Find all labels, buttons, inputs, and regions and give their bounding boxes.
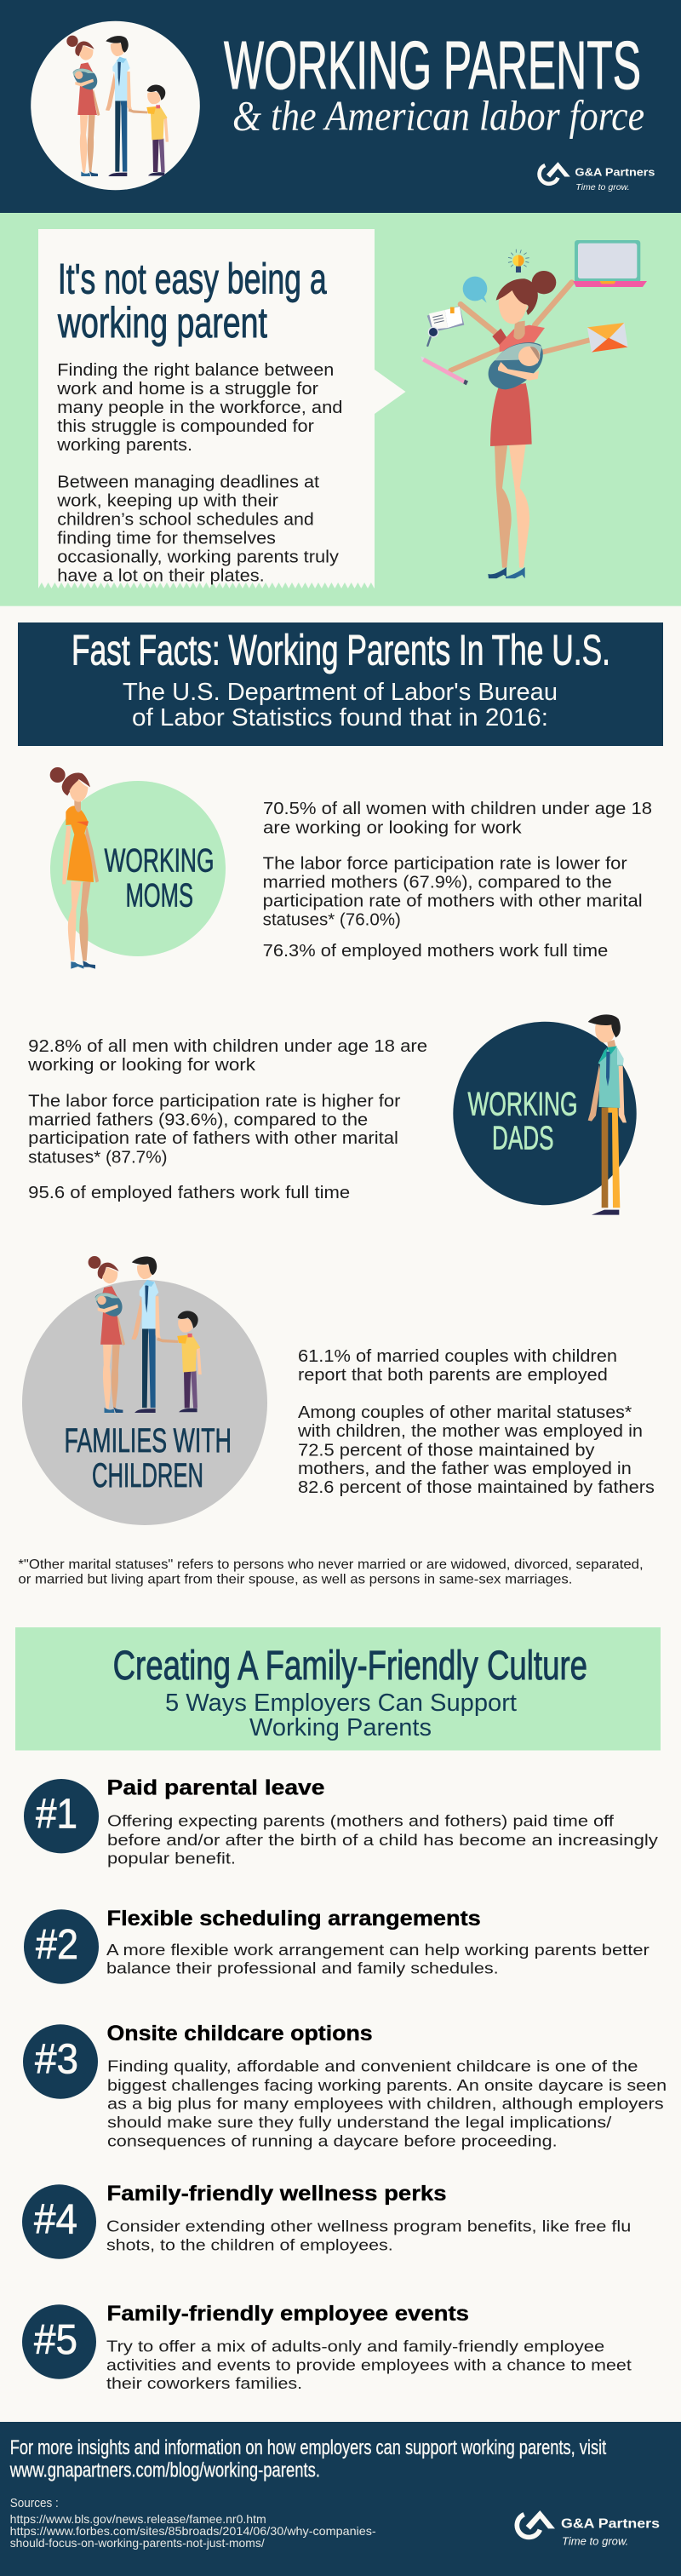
moms statistics: The labor force participation rate is lower for: [263, 854, 627, 873]
intro text: [56, 361, 342, 586]
heading and text: [107, 2022, 667, 2150]
dads statistics: participation rate of fathers with other marital: [28, 1129, 398, 1148]
badge #2: #2: [36, 1922, 78, 1968]
intro heading: working parent: [57, 299, 267, 347]
intro text: many people in the workforce, and: [57, 399, 343, 417]
section heading: family-friendly culture: [15, 1627, 661, 1751]
dads badge: DADS: [492, 1121, 553, 1157]
moms statistics: 76.3% of employed mothers work full time: [263, 942, 608, 961]
dads statistics: married fathers (93.6%), compared to the: [28, 1110, 368, 1129]
moms badge: WORKING: [104, 842, 215, 879]
families statistics: 82.6 percent of those maintained by fathers: [298, 1478, 655, 1497]
moms statistics: [263, 800, 652, 961]
intro text: Between managing deadlines at: [57, 473, 319, 492]
section heading: family-friendly culture: Working Parents: [249, 1714, 432, 1741]
badge #2: [24, 1909, 99, 1984]
icon: lightbulb: [508, 250, 529, 273]
item 4: wellness perks: [22, 2182, 631, 2259]
logo: G&A Partners: [540, 162, 655, 192]
illustration: family: [89, 1256, 202, 1413]
panel: working dads: [27, 1014, 637, 1215]
heading and text: balance their professional and family schedules.: [106, 1959, 499, 1977]
heading and text: shots, to the children of employees.: [106, 2235, 393, 2253]
intro text: children’s school schedules and: [57, 511, 314, 530]
badge #3: [23, 2024, 98, 2099]
moms badge: MOMS: [126, 878, 193, 915]
icon: open book and magnifier: [427, 306, 464, 346]
families statistics: 61.1% of married couples with children: [298, 1347, 617, 1366]
dads statistics: [27, 1037, 427, 1202]
callout card: [38, 229, 405, 588]
sources: [10, 2497, 376, 2550]
sources: should-focus-on-working-parents-not-just-moms/: [10, 2536, 265, 2550]
badge #4: [22, 2184, 96, 2259]
badge #5: [22, 2304, 96, 2379]
panel: intro: [0, 213, 681, 606]
dads statistics: statuses* (87.7%): [28, 1149, 168, 1168]
families statistics: report that both parents are employed: [298, 1366, 608, 1385]
footnote: *"Other marital statuses" refers to persons who never married or are widowed, divorced, separated,: [18, 1558, 644, 1572]
dads statistics: 92.8% of all men with children under age 18 are: [28, 1037, 427, 1056]
heading and text: biggest challenges facing working parents. An onsite daycare is seen: [107, 2076, 667, 2094]
intro text: this struggle is compounded for: [57, 417, 314, 436]
illustration: family in circle: [31, 21, 200, 190]
panel: families with children: [22, 1256, 655, 1525]
families badge: FAMILIES WITH: [65, 1422, 232, 1460]
dads badge: WORKING: [468, 1086, 577, 1122]
logo: G&A Partners: Time to grow.: [562, 2535, 628, 2547]
heading and text: activities and events to provide employees with a chance to meet: [106, 2355, 632, 2373]
logo: G&A Partners: [517, 2510, 660, 2547]
intro text: occasionally, working parents truly: [57, 548, 339, 567]
moms badge: [50, 781, 226, 956]
heading and text: [106, 1907, 650, 1977]
moms statistics: statuses* (76.0%): [263, 911, 401, 930]
icon: speech bubble: [463, 277, 487, 303]
heading and text: Consider extending other wellness program benefits, like free flu: [106, 2217, 631, 2235]
moms statistics: 70.5% of all women with children under age 18: [263, 800, 652, 818]
dads statistics: The labor force participation rate is higher for: [28, 1092, 401, 1110]
families badge: CHILDREN: [92, 1457, 203, 1495]
intro text: finding time for themselves: [57, 530, 276, 548]
illustration: mother in orange dress: [50, 767, 99, 969]
families statistics: [297, 1347, 655, 1497]
icon: laptop: [573, 240, 647, 287]
item 2: flexible scheduling: [24, 1907, 650, 1984]
badge #3: #3: [35, 2036, 78, 2082]
families statistics: Among couples of other marital statuses*: [298, 1403, 632, 1422]
logo: G&A Partners: Time to grow.: [575, 183, 630, 192]
illustration: multitasking mother: [421, 240, 647, 578]
section heading: fast facts: [18, 622, 663, 746]
footnote: or married but living apart from their spouse, as well as persons in same-sex marriages.: [18, 1572, 572, 1586]
sources: https://www.bls.gov/news.release/famee.nr0.htm: [10, 2512, 266, 2526]
families statistics: 72.5 percent of those maintained by: [298, 1441, 594, 1460]
heading and text: Flexible scheduling arrangements: [107, 1907, 481, 1931]
item 3: onsite childcare: [23, 2022, 667, 2150]
heading and text: [107, 1776, 659, 1867]
footer: [0, 2422, 681, 2576]
logo: G&A Partners: G&A Partners: [561, 2516, 660, 2531]
heading and text: Offering expecting parents (mothers and fothers) paid time off: [107, 1812, 615, 1829]
header banner: [0, 0, 681, 213]
item 1: paid parental leave: [24, 1776, 659, 1867]
heading and text: Onsite childcare options: [107, 2022, 373, 2045]
heading and text: as a big plus for many employees with children, although employers: [107, 2095, 664, 2113]
heading and text: Finding quality, affordable and convenient childcare is one of the: [107, 2057, 638, 2075]
heading and text: Paid parental leave: [107, 1776, 325, 1800]
heading and text: Family-friendly wellness perks: [107, 2182, 446, 2206]
logo: G&A Partners: G&A Partners: [575, 166, 655, 179]
badge #1: [24, 1779, 99, 1853]
heading and text: their coworkers families.: [106, 2374, 302, 2392]
intro text: work and home is a struggle for: [56, 380, 318, 399]
badge #5: #5: [34, 2317, 77, 2363]
intro text: work, keeping up with their: [56, 492, 278, 511]
heading and text: before and/or after the birth of a child has become an increasingly: [107, 1831, 659, 1849]
families statistics: mothers, and the father was employed in: [298, 1460, 632, 1478]
intro text: Finding the right balance between: [57, 361, 334, 380]
dads statistics: 95.6 of employed fathers work full time: [28, 1184, 350, 1202]
illustration: father in teal shirt: [588, 1014, 627, 1215]
heading and text: should make sure they fully understand the legal implications/: [107, 2113, 612, 2131]
heading and text: A more flexible work arrangement can help working parents better: [106, 1941, 650, 1959]
footnote: [18, 1558, 644, 1586]
families statistics: with children, the mother was employed in: [297, 1422, 643, 1441]
item 5: employee events: [22, 2302, 632, 2392]
call to action: www.gnapartners.com/blog/working-parents.: [9, 2459, 320, 2482]
heading and text: Try to offer a mix of adults-only and family-friendly employee: [106, 2338, 604, 2355]
section heading: family-friendly culture: 5 Ways Employers Can Support: [165, 1690, 517, 1717]
badge #4: #4: [34, 2196, 77, 2242]
sources: Sources :: [10, 2497, 59, 2510]
section heading: fast facts: The U.S. Department of Labor's Bureau: [123, 679, 558, 706]
dads badge: [453, 1022, 637, 1205]
badge #1: #1: [36, 1791, 77, 1837]
intro text: have a lot on their plates.: [57, 567, 265, 586]
sources: https://www.forbes.com/sites/85broads/2014/06/30/why-companies-: [10, 2524, 376, 2538]
intro text: working parents.: [56, 436, 192, 455]
icon: pencil: [421, 356, 468, 385]
icon: envelope: [587, 323, 628, 353]
heading and text: [106, 2182, 631, 2253]
dads statistics: working or looking for work: [27, 1056, 256, 1075]
panel: working moms: [50, 767, 652, 969]
call to action: [9, 2436, 606, 2482]
moms statistics: are working or looking for work: [263, 819, 523, 838]
intro heading: [57, 255, 327, 347]
moms statistics: married mothers (67.9%), compared to the: [263, 873, 612, 892]
heading and text: [106, 2302, 632, 2392]
moms statistics: participation rate of mothers with other marital: [263, 892, 643, 911]
families badge: [22, 1280, 267, 1525]
heading and text: Family-friendly employee events: [107, 2302, 469, 2326]
heading and text: popular benefit.: [107, 1850, 236, 1867]
heading and text: consequences of running a daycare before proceeding.: [107, 2132, 558, 2150]
section heading: fast facts: of Labor Statistics found that in 2016:: [132, 704, 548, 731]
intro heading: It's not easy being a: [58, 255, 327, 302]
